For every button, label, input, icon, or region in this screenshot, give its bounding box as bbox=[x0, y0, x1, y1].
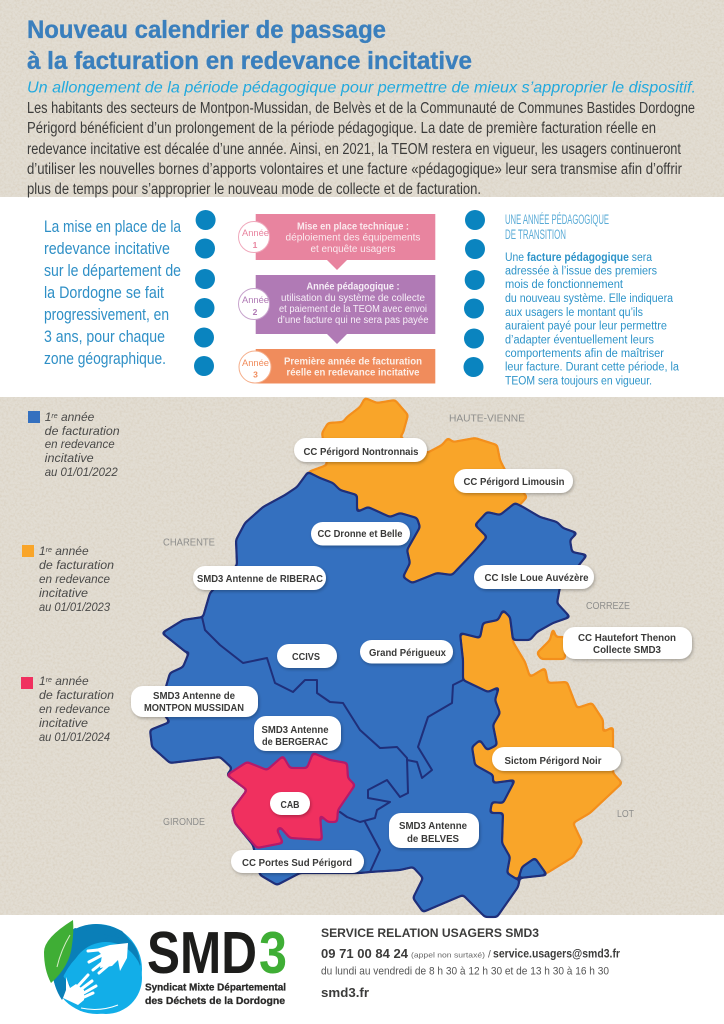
timeline: year 1: et enquête usagers bbox=[310, 244, 396, 255]
icon: circle with hands and leaf bbox=[44, 920, 142, 1014]
legend: 2024: de facturation bbox=[39, 688, 114, 702]
legend: 2023: en redevance bbox=[39, 572, 110, 586]
legend: 2022: re bbox=[51, 413, 58, 420]
legend: 2022: de facturation bbox=[45, 424, 120, 438]
right text block paragraph: adressée à l’issue des premiers bbox=[505, 266, 657, 278]
label: SMD3 Antenne de BELVES: SMD3 Antenne bbox=[399, 820, 467, 832]
label: CC Hautefort Thenon Collecte SMD3: CC Hautefort Thenon bbox=[578, 632, 676, 644]
label: SMD3 Antenne de BELVES bbox=[389, 813, 479, 848]
dots column right bbox=[464, 210, 485, 377]
contact block: smd3.fr bbox=[321, 985, 369, 1000]
right text block paragraph: du nouveau système. Elle indiquera bbox=[505, 293, 674, 305]
timeline: year 3: Année bbox=[242, 358, 269, 368]
contact block: du lundi au vendredi de 8 h 30 à 12 h 30 et de 13 h 30 à 16 h 30 bbox=[321, 966, 609, 978]
label: CC Dronne et Belle bbox=[311, 522, 410, 546]
left text block: progressive rollout: la Dordogne se fait bbox=[44, 283, 164, 302]
label: SMD3 Antenne de BERGERAC: SMD3 Antenne bbox=[262, 724, 329, 736]
contact block bbox=[321, 926, 620, 1000]
right text block paragraph: comportements afin de maîtriser bbox=[505, 348, 664, 360]
intro paragraph bbox=[27, 100, 695, 198]
legend: 2023: re bbox=[46, 547, 52, 554]
label: CC Périgord Nontronnais bbox=[294, 438, 427, 462]
zone orange north bbox=[308, 398, 527, 590]
map labels bbox=[131, 438, 692, 873]
zone red CAB bbox=[227, 753, 355, 848]
label: CC Périgord Nontronnais: CC Périgord Nontronnais bbox=[304, 446, 419, 458]
timeline: year 1: déploiement des équipements bbox=[286, 232, 420, 244]
title: à la facturation en redevance incitative bbox=[27, 47, 472, 75]
legend: 2023: au 01/01/2023 bbox=[39, 600, 110, 614]
label: CCIVS: CCIVS bbox=[292, 651, 320, 663]
legend: 2022: 1 bbox=[45, 410, 51, 424]
label: CC Périgord Limousin: CC Périgord Limousin bbox=[464, 476, 564, 488]
timeline: year 3: 3 bbox=[253, 370, 258, 380]
right text block paragraph: aux usagers le montant qu’ils bbox=[505, 307, 643, 319]
label: SMD3 Antenne de RIBERAC: SMD3 Antenne de RIBERAC bbox=[197, 573, 323, 585]
neighbouring departments labels: LOT bbox=[617, 808, 634, 820]
label: CC Périgord Limousin bbox=[454, 469, 573, 493]
left text block: progressive rollout: La mise en place de la bbox=[44, 217, 181, 236]
label: Sictom Périgord Noir: Sictom Périgord Noir bbox=[504, 755, 602, 767]
right text block paragraph: Une facture pédagogique sera bbox=[505, 252, 653, 264]
label: SMD3 Antenne de MONTPON MUSSIDAN: MONTPON MUSSIDAN bbox=[144, 702, 244, 714]
label: SMD3 Antenne de BERGERAC: de BERGERAC bbox=[262, 736, 328, 748]
timeline: year 2: utilisation du système de collecte bbox=[281, 293, 425, 304]
right text block paragraph: mois de fonctionnement bbox=[505, 279, 624, 291]
timeline: year 2: 2 bbox=[253, 307, 258, 317]
logo tagline: Syndicat Mixte Départemental bbox=[145, 982, 286, 994]
label: CCIVS bbox=[277, 644, 337, 668]
left text block: progressive rollout: progressivement, en bbox=[44, 305, 169, 324]
timeline: year 3 bbox=[239, 349, 435, 384]
label: SMD3 Antenne de BERGERAC bbox=[254, 716, 341, 751]
left text block: progressive rollout: zone géographique. bbox=[44, 349, 166, 368]
left text block: progressive rollout: redevance incitative bbox=[44, 239, 170, 258]
legend: 2024: incitative bbox=[39, 716, 88, 730]
neighbouring departments labels: HAUTE-VIENNE bbox=[449, 412, 525, 424]
timeline: year 2: Année bbox=[242, 295, 269, 305]
right text block heading: DE TRANSITION bbox=[505, 227, 566, 242]
left text block: progressive rollout bbox=[44, 217, 181, 368]
dots column left bbox=[194, 210, 216, 376]
label: CAB bbox=[270, 792, 310, 815]
zone blue main bbox=[150, 472, 587, 917]
label: CAB: CAB bbox=[280, 799, 300, 811]
legend: 2022: au 01/01/2022 bbox=[45, 465, 118, 479]
label: SMD3 Antenne de MONTPON MUSSIDAN bbox=[131, 686, 258, 717]
label: SMD3 Antenne de RIBERAC bbox=[193, 566, 326, 590]
timeline: year 1: Mise en place technique : bbox=[297, 222, 409, 232]
label: CC Dronne et Belle: CC Dronne et Belle bbox=[318, 528, 403, 540]
label: SMD3 Antenne de BELVES: de BELVES bbox=[407, 833, 459, 845]
timeline: year 2 bbox=[238, 275, 435, 344]
title bbox=[27, 16, 472, 75]
legend: 2024: re bbox=[46, 677, 52, 684]
neighbouring departments labels: GIRONDE bbox=[163, 816, 205, 828]
logo SMD3: 3 bbox=[259, 920, 287, 986]
left text block: progressive rollout: sur le département de bbox=[44, 261, 181, 280]
timeline: year 2: Année pédagogique : bbox=[306, 282, 400, 292]
legend: 2022: en redevance bbox=[45, 437, 115, 451]
timeline: year 3: Première année de facturation bbox=[284, 356, 422, 368]
logo SMD3 bbox=[44, 920, 287, 1014]
legend: 2024: en redevance bbox=[39, 702, 110, 716]
timeline: year 2: d’une facture qui ne sera pas payée bbox=[278, 315, 429, 326]
label: CC Isle Loue Auvézère: CC Isle Loue Auvézère bbox=[484, 572, 589, 584]
legend: 2024 bbox=[21, 674, 114, 744]
right text block paragraph: auraient payé pour leur permettre bbox=[505, 320, 667, 332]
legend: 2022 bbox=[28, 410, 120, 479]
legend: 2024: au 01/01/2024 bbox=[39, 730, 110, 744]
neighbouring departments labels: CHARENTE bbox=[163, 536, 215, 548]
legend: 2023: de facturation bbox=[39, 558, 114, 572]
timeline: year 1 bbox=[238, 214, 435, 270]
right text block paragraph: TEOM sera toujours en vigueur. bbox=[505, 376, 652, 388]
left text block: progressive rollout: 3 ans, pour chaque bbox=[44, 327, 165, 346]
label: CC Isle Loue Auvézère bbox=[474, 565, 594, 589]
legend: 2022: année bbox=[58, 410, 95, 424]
legend: 2023: année bbox=[52, 544, 89, 558]
timeline: year 1: 1 bbox=[253, 240, 258, 250]
zone orange small Hautefort bbox=[537, 628, 565, 659]
legend: 2024: 1 bbox=[39, 674, 46, 688]
contact block: service.usagers@smd3.fr bbox=[493, 948, 620, 960]
contact block: / bbox=[488, 950, 491, 960]
label: CC Hautefort Thenon Collecte SMD3: Collecte SMD3 bbox=[593, 644, 661, 656]
right text block paragraph: leur facture. Durant cette période, la bbox=[505, 362, 680, 374]
contact block: 09 71 00 84 24 bbox=[321, 946, 409, 961]
label: Grand Périgueux bbox=[360, 640, 453, 664]
wordmark: SMD bbox=[147, 920, 257, 986]
timeline: year 3: réelle en redevance incitative bbox=[286, 368, 420, 378]
map of Dordogne bbox=[150, 398, 622, 917]
label: CC Portes Sud Périgord: CC Portes Sud Périgord bbox=[242, 857, 352, 869]
legend: 2023 bbox=[22, 544, 114, 614]
internal borders bbox=[202, 617, 463, 872]
logo SMD3: des Déchets de la Dordogne bbox=[145, 995, 285, 1007]
legend: 2022: incitative bbox=[45, 451, 94, 465]
subtitle: Un allongement de la période pédagogique pour permettre de mieux s’approprier le dispositif. bbox=[27, 80, 696, 96]
legend: 2024: année bbox=[52, 674, 89, 688]
label: SMD3 Antenne de MONTPON MUSSIDAN: SMD3 Antenne de bbox=[153, 690, 235, 702]
legend: 2023: 1 bbox=[39, 544, 46, 558]
label: CC Portes Sud Périgord bbox=[231, 850, 364, 873]
label: Grand Périgueux: Grand Périgueux bbox=[369, 647, 446, 659]
right text block paragraph: d’adapter éventuellement leurs bbox=[505, 334, 654, 346]
title: Nouveau calendrier de passage bbox=[27, 16, 386, 44]
right text block heading: UNE ANNÉE PÉDAGOGIQUE bbox=[505, 212, 609, 227]
label: Sictom Périgord Noir bbox=[492, 747, 621, 771]
neighbouring departments labels: CORREZE bbox=[586, 600, 630, 612]
timeline: year 1: Année bbox=[242, 228, 269, 238]
zone orange east bbox=[460, 610, 622, 880]
legend: 2023: incitative bbox=[39, 586, 88, 600]
contact block: (appel non surtaxé) bbox=[411, 950, 486, 960]
timeline: year 2: et paiement de la TEOM avec envoi bbox=[279, 304, 427, 315]
label: CC Hautefort Thenon Collecte SMD3 bbox=[563, 627, 692, 659]
neighbouring departments labels bbox=[163, 412, 634, 828]
right text block heading bbox=[505, 212, 609, 242]
right text block paragraph bbox=[505, 252, 680, 388]
intro paragraph: plus de temps pour s’approprier le nouveau mode de collecte et de facturation. bbox=[27, 181, 481, 198]
contact block: SERVICE RELATION USAGERS SMD3 bbox=[321, 926, 539, 940]
